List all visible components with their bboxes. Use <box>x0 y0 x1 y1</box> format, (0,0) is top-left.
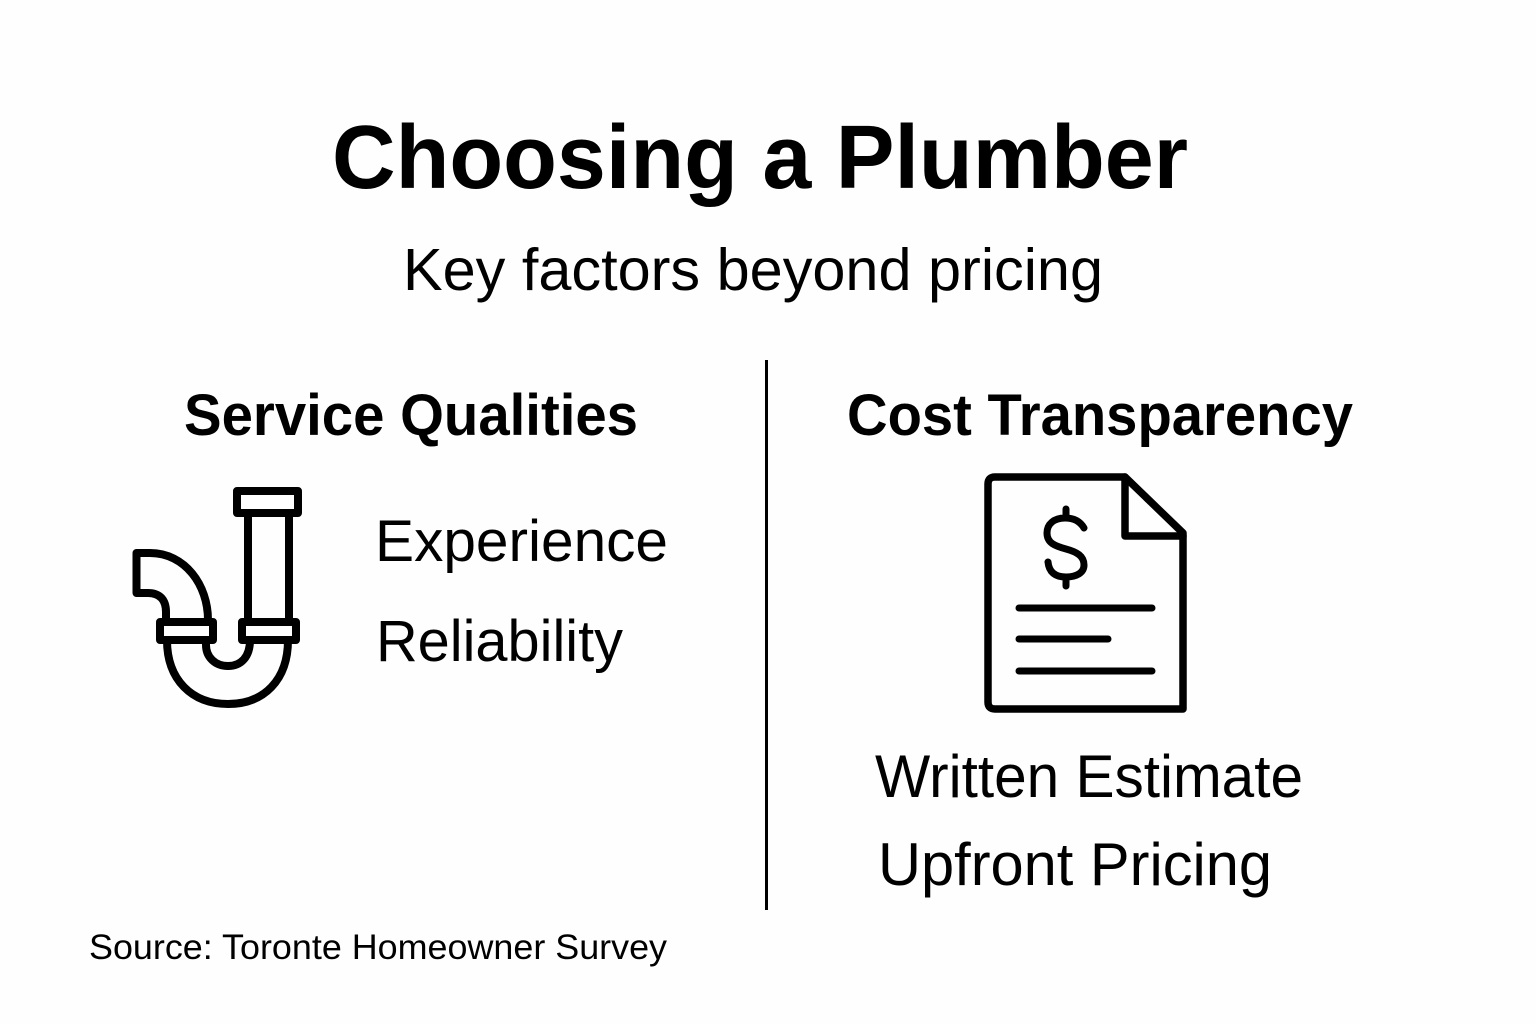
subtitle: Key factors beyond pricing <box>403 237 1103 303</box>
heading: cost transparency: Cost Transparency <box>847 383 1353 448</box>
title: Choosing a Plumber <box>332 108 1188 208</box>
list: cost items <box>875 743 1303 898</box>
divider <box>765 360 768 910</box>
source note: Source: Toronte Homeowner Survey <box>89 928 668 967</box>
panel: cost transparency <box>847 383 1353 898</box>
item: reliability: Reliability <box>376 609 623 674</box>
panel: service qualities <box>136 383 668 704</box>
icon: pipe <box>136 491 298 704</box>
item: experience: Experience <box>375 509 668 574</box>
list: service items <box>375 509 668 674</box>
icon: estimate document <box>988 477 1183 709</box>
item: written estimate: Written Estimate <box>875 743 1303 810</box>
item: upfront pricing: Upfront Pricing <box>878 831 1272 898</box>
heading: service qualities: Service Qualities <box>184 383 638 448</box>
